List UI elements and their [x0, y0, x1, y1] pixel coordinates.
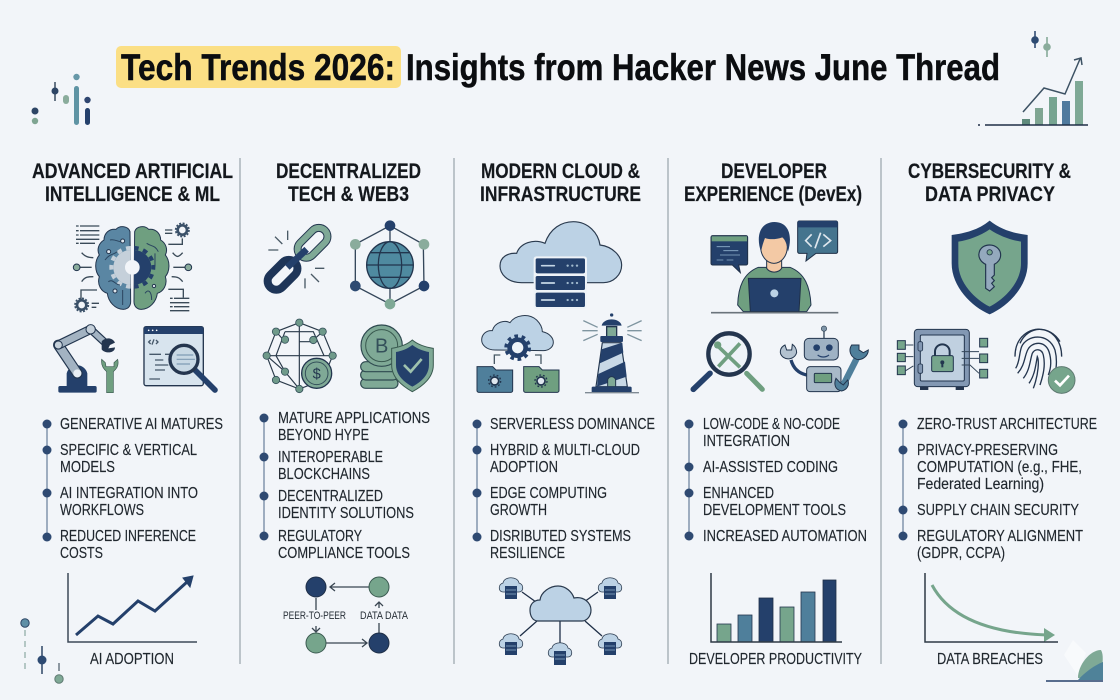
bullet list: cloud: EDGE COMPUTING	[490, 485, 607, 502]
icon: code window with magnifier	[144, 327, 215, 390]
icon: cloud with server rack	[500, 222, 622, 309]
heading: security: CYBERSECURITY &	[908, 160, 1071, 183]
icon: brain with gear	[73, 223, 192, 312]
bullet list: DevEx	[684, 416, 867, 545]
heading: Web3: TECH & WEB3	[288, 183, 409, 206]
bar chart: developer productivity: DEVELOPER PRODUCTIVITY	[689, 651, 862, 668]
bullet list: cloud: ADOPTION	[490, 459, 558, 476]
diagram: peer-to-peer: PEER-TO-PEER	[283, 610, 346, 622]
icon: robot arm and wrench	[54, 325, 118, 393]
heading: DevEx	[684, 160, 862, 206]
decorative icon: bottom-left marks	[21, 619, 63, 683]
diagram: peer-to-peer: DATA DATA	[360, 610, 409, 622]
heading: security	[908, 160, 1071, 206]
icon: developer at laptop	[711, 221, 838, 313]
bullet list: security: REGULATORY ALIGNMENT	[917, 528, 1083, 545]
column dividers	[240, 158, 881, 664]
bullet list: cloud: RESILIENCE	[490, 545, 565, 562]
icon: bitcoin coins with shield	[361, 325, 433, 392]
bullet list: DevEx: INCREASED AUTOMATION	[703, 528, 867, 545]
icon: bitcoin coins with shield: B	[375, 336, 388, 358]
icon: globe network	[350, 220, 429, 309]
bullet list: AI: AI INTEGRATION INTO	[60, 485, 198, 502]
bullet list: AI: GENERATIVE AI MATURES	[60, 416, 223, 433]
bullet list: cloud: GROWTH	[490, 502, 547, 519]
heading: security: DATA PRIVACY	[925, 183, 1055, 206]
bullet list: security: PRIVACY-PRESERVING	[917, 442, 1058, 459]
bar chart: developer productivity	[689, 573, 862, 668]
title: Tech Trends 2026:	[121, 47, 395, 88]
heading: AI: INTELLIGENCE & ML	[45, 183, 220, 206]
icon: crypto mesh with coin	[263, 319, 336, 393]
heading: DevEx: EXPERIENCE (DevEx)	[684, 183, 862, 206]
bullet list: DevEx: LOW-CODE & NO-CODE	[703, 416, 840, 433]
title: Insights from Hacker News June Thread	[406, 47, 1000, 88]
bullet list: Web3: INTEROPERABLE	[278, 449, 383, 466]
icon: robot with wrenches	[780, 326, 868, 392]
bullet list: DevEx: AI-ASSISTED CODING	[703, 459, 838, 476]
bullet list: AI: SPECIFIC & VERTICAL	[60, 442, 197, 459]
line chart: AI adoption: AI ADOPTION	[90, 651, 174, 668]
heading: cloud: INFRASTRUCTURE	[480, 183, 641, 206]
decorative icon: top-left data marks	[32, 74, 91, 125]
bullet list: security: COMPUTATION (e.g., FHE,	[917, 459, 1082, 476]
bullet list: Web3: MATURE APPLICATIONS	[278, 410, 430, 427]
bullet list: security: Federated Learning)	[917, 476, 1044, 493]
panel: advanced artificial intelligence	[32, 160, 233, 668]
bullet list: cloud: HYBRID & MULTI-CLOUD	[490, 442, 640, 459]
icon: magnifier with tools	[693, 333, 762, 389]
bullet list: Web3: BLOCKCHAINS	[278, 466, 370, 483]
bullet list: cloud: DISRIBUTED SYSTEMS	[490, 528, 631, 545]
heading: DevEx: DEVELOPER	[721, 160, 827, 183]
bullet list: DevEx: INTEGRATION	[703, 433, 790, 450]
panel: decentralized tech	[260, 160, 433, 653]
decorative icon: top-right growth chart	[978, 31, 1088, 126]
bullet list: AI: WORKFLOWS	[60, 502, 144, 519]
icon: fingerprint with check	[1015, 329, 1075, 393]
bullet list: security	[898, 416, 1097, 562]
bullet list: Web3: DECENTRALIZED	[278, 488, 383, 505]
heading: AI	[32, 160, 233, 206]
panel: developer experience	[684, 160, 868, 668]
bullet list: Web3	[260, 410, 430, 562]
line chart: data breaches: DATA BREACHES	[937, 651, 1043, 668]
line chart: data breaches	[925, 573, 1058, 668]
diagram: peer-to-peer	[283, 577, 409, 653]
line chart: AI adoption	[68, 573, 197, 668]
bullet list: Web3: IDENTITY SOLUTIONS	[278, 505, 414, 522]
heading: cloud: MODERN CLOUD &	[481, 160, 640, 183]
bullet list: cloud: SERVERLESS DOMINANCE	[490, 416, 655, 433]
icon: safe with padlock	[897, 329, 988, 390]
panel: cybersecurity	[897, 160, 1097, 668]
decorative icon: bottom-right sparkle	[1046, 640, 1103, 681]
bullet list: security: (GDPR, CCPA)	[917, 545, 1005, 562]
bullet list: AI: REDUCED INFERENCE	[60, 528, 196, 545]
bullet list: AI: MODELS	[60, 459, 115, 476]
icon: lighthouse	[582, 313, 642, 393]
bullet list: security: SUPPLY CHAIN SECURITY	[917, 502, 1079, 519]
heading: Web3: DECENTRALIZED	[276, 160, 421, 183]
heading: cloud	[480, 160, 641, 206]
bullet list: Web3: COMPLIANCE TOOLS	[278, 545, 410, 562]
icon: broken chain	[264, 224, 331, 293]
bullet list: DevEx: DEVELOPMENT TOOLS	[703, 502, 846, 519]
title	[116, 46, 1000, 88]
bullet list: DevEx: ENHANCED	[703, 485, 774, 502]
heading: Web3	[276, 160, 421, 206]
icon: shield with key	[952, 221, 1028, 314]
icon: cloud gear with folders	[477, 316, 559, 392]
bullet list: Web3: REGULATORY	[278, 528, 362, 545]
bullet list: AI	[42, 416, 223, 562]
heading: AI: ADVANCED ARTIFICIAL	[32, 160, 233, 183]
panel: modern cloud	[472, 160, 655, 665]
bullet list: Web3: BEYOND HYPE	[278, 427, 369, 444]
bullet list: cloud	[472, 416, 655, 562]
icon: crypto mesh with coin: $	[313, 367, 321, 383]
diagram: cloud network	[499, 578, 622, 665]
bullet list: AI: COSTS	[60, 545, 103, 562]
